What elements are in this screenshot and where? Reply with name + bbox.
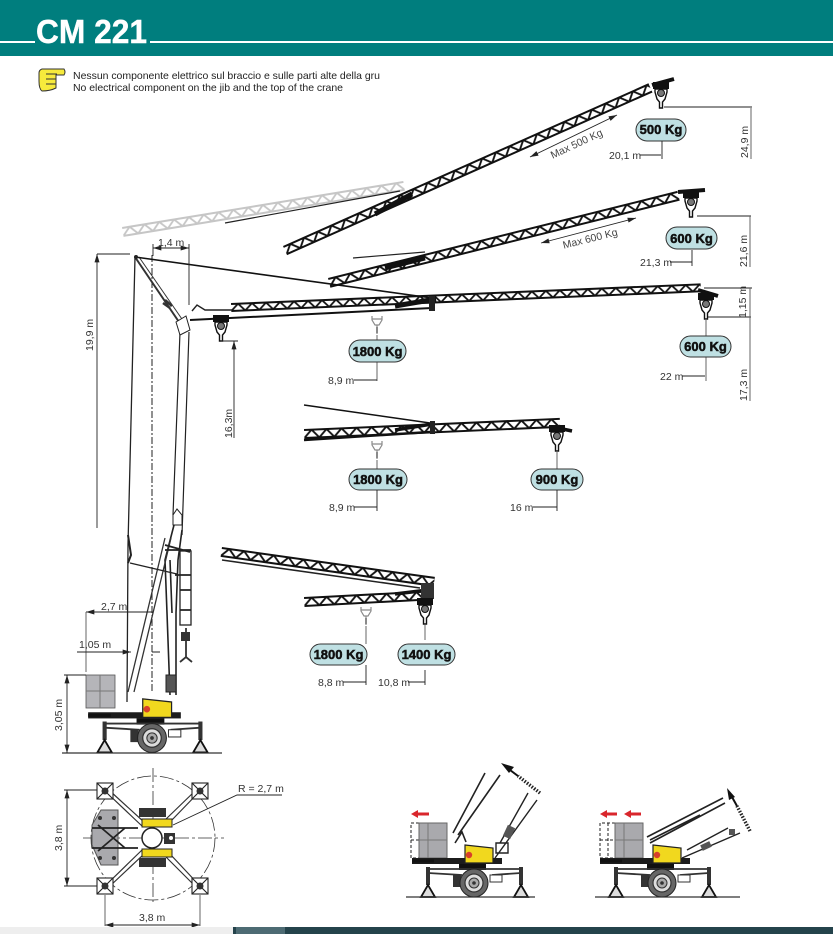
dimension 19,9 m: 19,9 m (84, 319, 96, 351)
dimension 1,4 m (153, 237, 189, 305)
ground (595, 896, 740, 898)
red arrow (411, 810, 429, 818)
dimension 22 m: 22 m (660, 371, 684, 383)
title: CM 221 (36, 13, 147, 50)
load 1400 kg: 1400 Kg (402, 647, 451, 662)
dimension 2,7 m (86, 601, 152, 672)
max 500 kg arrow (530, 115, 617, 157)
load 1800 kg (310, 644, 367, 665)
hook (683, 191, 699, 217)
load 600 kg: 600 Kg (684, 339, 727, 354)
dimension 3,8 m horizontal (105, 895, 200, 926)
load 1800 kg: 1800 Kg (353, 344, 402, 359)
dimension 1,4 m: 1,4 m (158, 237, 185, 249)
load 600 kg: 600 Kg (670, 231, 713, 246)
grey folded jib (122, 181, 405, 237)
main crane mast and tower (62, 255, 432, 753)
dimension R = 2,7 m: R = 2,7 m (238, 783, 284, 795)
jib knuckle (176, 316, 190, 335)
load 900 kg: 900 Kg (536, 472, 578, 487)
ballast (86, 675, 115, 708)
dimension 3,05 m: 3,05 m (53, 699, 65, 731)
notice text: Nessun componente elettrico sul braccio e sulle parti alte della gru (73, 70, 380, 82)
lower mast (165, 525, 182, 695)
centre line (151, 255, 153, 692)
erection step 1 (406, 763, 540, 897)
dimension 3,8 m horizontal: 3,8 m (139, 912, 166, 924)
dimension 16 m (510, 490, 557, 514)
jib level 3 (221, 547, 455, 689)
hook at tip (698, 293, 714, 319)
load 500 kg (636, 119, 686, 141)
tie and counter struts (127, 257, 135, 702)
grey hook (372, 441, 382, 459)
outrigger arms (105, 791, 200, 886)
dimension 21,3 m: 21,3 m (640, 257, 672, 269)
ground (406, 896, 535, 898)
jib at 24.9 m (283, 79, 752, 255)
dimension 3,8 m vertical: 3,8 m (53, 824, 65, 851)
load 1400 kg (398, 644, 455, 665)
ground (62, 752, 222, 754)
ballast (92, 810, 118, 865)
header band (0, 0, 833, 56)
max 600 kg arrow (541, 218, 636, 243)
notice: no electrical component (39, 69, 380, 94)
base (412, 845, 528, 897)
slewing circle (91, 776, 215, 900)
ballast with dashed positions (600, 823, 643, 858)
hook (417, 598, 433, 624)
jib at 21.6 m (328, 190, 751, 288)
jib horizontal (190, 283, 752, 401)
load 500 kg: 500 Kg (640, 122, 682, 137)
dimension 8,8 m (318, 665, 366, 689)
dimension 3,8 m vertical (53, 790, 97, 886)
max 600 kg label: Max 600 Kg (562, 226, 619, 252)
slewing hub (142, 828, 162, 848)
dimension 8,9 m: 8,9 m (329, 502, 356, 514)
load 600 kg (680, 336, 731, 357)
erection step 2 (595, 788, 750, 897)
dimension R = 2,7 m (173, 783, 284, 825)
base (600, 845, 716, 897)
load 1800 kg: 1800 Kg (353, 472, 403, 487)
dimension 10,8 m: 10,8 m (378, 677, 410, 689)
grey hook (372, 316, 382, 334)
dimension 3,05 m (53, 675, 86, 753)
dimension 16 m: 16 m (510, 502, 534, 514)
dimension 8,9 m (329, 490, 377, 514)
load 900 kg (531, 469, 583, 490)
erection arrow (501, 763, 540, 793)
dimension 20,1 m: 20,1 m (609, 150, 641, 162)
jib level 2 (304, 405, 583, 514)
folded mast (453, 773, 500, 843)
dimension 8,9 m (328, 375, 377, 387)
load 1800 kg (349, 469, 407, 490)
footer band (0, 927, 833, 934)
dimension 1,15 m (704, 286, 752, 401)
notice text: No electrical component on the jib and the top of the crane (73, 82, 343, 94)
dimension 10,8 m (378, 670, 425, 689)
erection arrow (727, 788, 750, 831)
dimension 22 m (660, 371, 705, 383)
dimension 16,3 m (221, 341, 238, 438)
dimension 24,9 m: 24,9 m (739, 126, 751, 158)
load 1800 kg: 1800 Kg (314, 647, 363, 662)
outrigger pads (97, 783, 208, 894)
dimension 1,05 m: 1,05 m (79, 639, 111, 651)
dimension 24,9 m (664, 107, 752, 159)
folded mast (647, 798, 725, 843)
load 1800 kg (349, 340, 406, 362)
ballast with dashed position (411, 823, 447, 858)
upper mast (173, 332, 189, 535)
wheels (139, 808, 166, 817)
dimension 8,8 m: 8,8 m (318, 677, 345, 689)
dimension 16,3 m: 16,3m (223, 409, 235, 438)
dimension 17,3 m: 17,3 m (738, 369, 750, 401)
dimension 21,3 m (640, 250, 692, 269)
plan view of the crane (53, 768, 284, 926)
hook (549, 425, 565, 451)
hook (653, 82, 669, 108)
icon: pointing hand (39, 69, 65, 91)
load 600 kg (666, 227, 717, 249)
max 500 kg label: Max 500 Kg (549, 127, 605, 162)
dimension 21,6 m: 21,6 m (738, 235, 750, 267)
dimension 21,6 m (697, 216, 751, 267)
base frame (88, 699, 208, 752)
dimension 1,15 m: 1,15 m (737, 286, 749, 318)
yellow guards (142, 819, 172, 827)
grey hook (361, 607, 371, 625)
dimension 2,7 m: 2,7 m (101, 601, 128, 613)
dimension 1,05 m (77, 639, 160, 652)
hook near mast (213, 315, 229, 341)
red arrows (600, 810, 641, 818)
dimension 20,1 m (609, 141, 662, 162)
dimension 8,9 m: 8,9 m (328, 375, 355, 387)
